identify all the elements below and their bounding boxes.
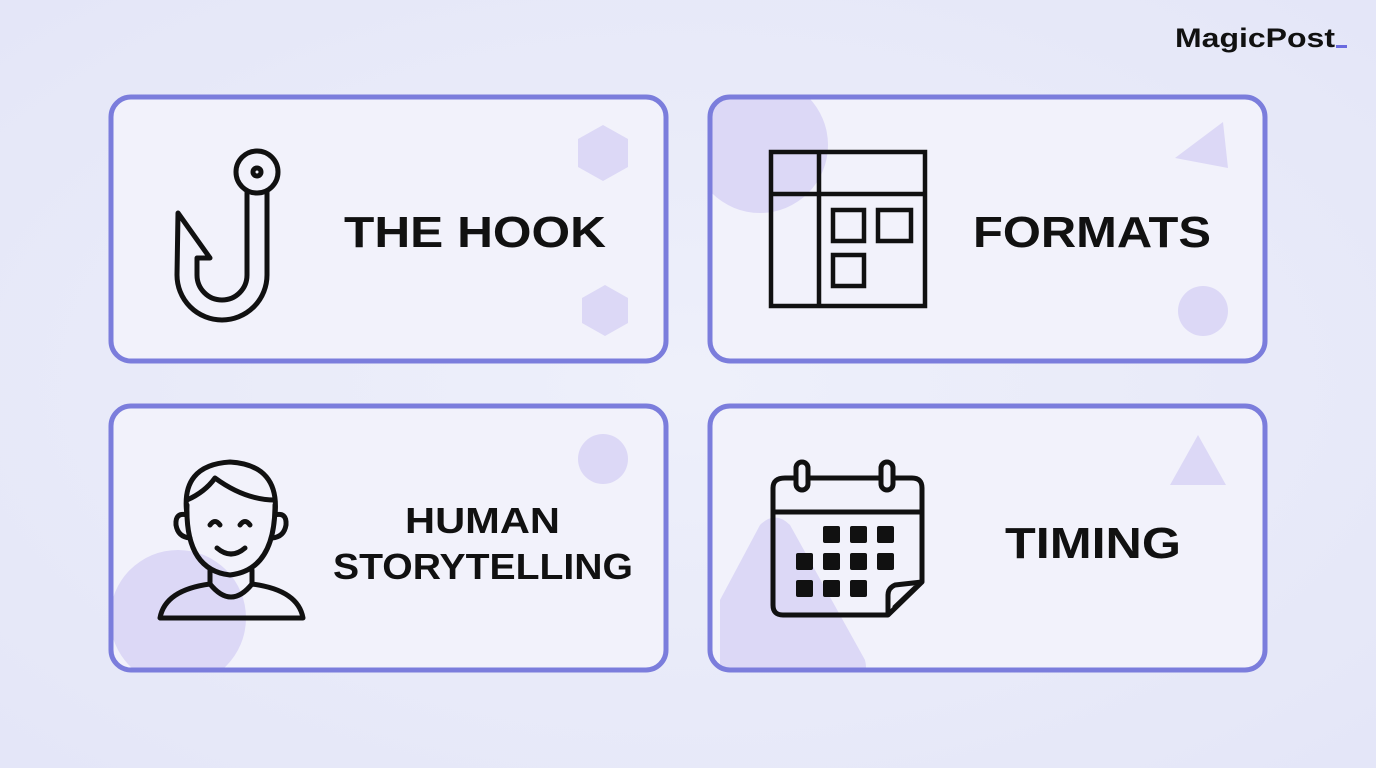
icon: layout grid [771, 152, 925, 306]
heading: timing: TIMING [1005, 519, 1181, 568]
heading: formats: FORMATS [973, 208, 1211, 257]
icon: fishing hook [177, 151, 278, 320]
heading: human storytelling: HUMAN [405, 500, 560, 541]
icon: person [160, 462, 303, 618]
panel: timing [710, 406, 1265, 680]
panel: human storytelling: STORYTELLING [333, 546, 633, 587]
logo: MagicPost [1175, 23, 1335, 53]
panel: formats [692, 77, 1265, 361]
panel: human storytelling [110, 406, 666, 686]
icon: calendar [773, 462, 922, 615]
panel: the hook [111, 97, 666, 361]
heading: the hook: THE HOOK [344, 208, 606, 257]
